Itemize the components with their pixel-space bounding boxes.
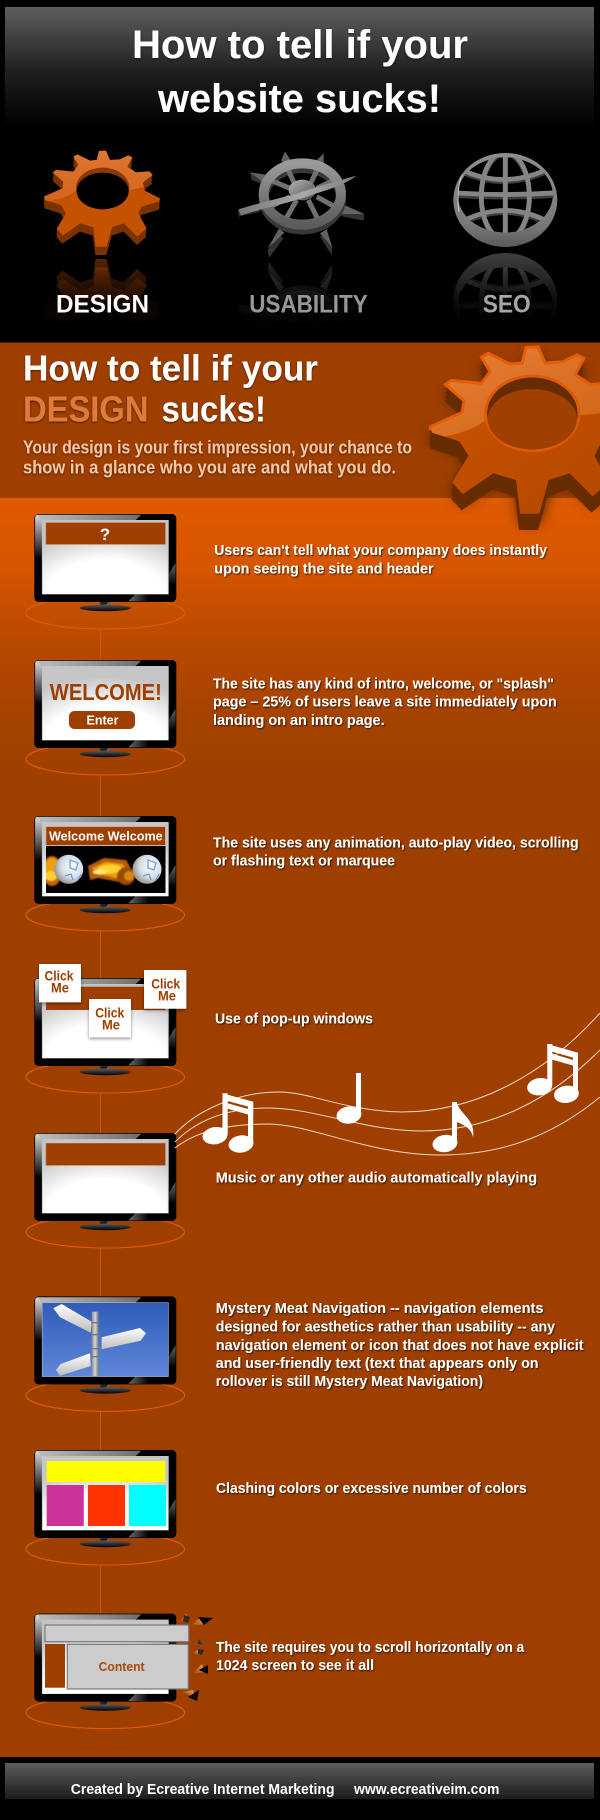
- item 1: monitor with question mark: [26, 514, 185, 629]
- item 3: monitor with animated marquee and flaming balls: [26, 816, 185, 931]
- section intro text: [23, 437, 412, 477]
- icon: usability wheel: [238, 152, 364, 258]
- item 1 text: upon seeing the site and header: [214, 561, 434, 577]
- item 6 text: Mystery Meat Navigation -- navigation elements: [216, 1301, 543, 1317]
- item 2 text: landing on an intro page.: [213, 713, 385, 729]
- item 6 text: and user-friendly text (text that appears only on: [216, 1356, 539, 1372]
- item 2 text: [213, 676, 557, 729]
- section intro text: Your design is your first impression, your chance to: [23, 437, 412, 457]
- icon: design gear: [30, 140, 170, 255]
- section heading: [23, 348, 318, 430]
- pop-up window 1: [39, 964, 81, 1002]
- item 5 text: Music or any other audio automatically playing: [216, 1170, 537, 1186]
- footer url: www.ecreativeim.com: [353, 1782, 499, 1798]
- pop-up window 1: Me: [51, 981, 69, 996]
- item 6: monitor with signpost: [26, 1296, 185, 1411]
- main title: website sucks!: [157, 77, 441, 121]
- item 1 text: [214, 543, 547, 577]
- pop-up window 2: Click: [151, 977, 181, 992]
- item 3 text: or flashing text or marquee: [213, 853, 395, 869]
- section intro text: show in a glance who you are and what you do.: [23, 457, 396, 477]
- icon: quarter note: [335, 1073, 363, 1125]
- main title: [132, 23, 468, 121]
- item 1: monitor with question mark: ?: [100, 525, 110, 544]
- item 2: monitor with welcome splash: Enter: [87, 714, 119, 728]
- section top background: [0, 342, 600, 498]
- item 2 text: The site has any kind of intro, welcome, or "splash": [213, 676, 554, 692]
- item 8 text: The site requires you to scroll horizontally on a: [216, 1640, 525, 1656]
- pop-up window 3: Click: [95, 1006, 125, 1021]
- footer panel: [5, 1763, 594, 1799]
- footer credit: Created by Ecreative Internet Marketing: [71, 1782, 335, 1798]
- section heading: DESIGN: [23, 389, 148, 430]
- item 7 text: Clashing colors or excessive number of colors: [216, 1481, 527, 1497]
- icon: beamed notes right: [526, 1044, 580, 1105]
- item 2 text: page – 25% of users leave a site immediately upon: [213, 694, 557, 710]
- item 4 text: Use of pop-up windows: [215, 1011, 373, 1027]
- label: usability: USABILITY: [249, 291, 368, 319]
- main title: How to tell if your: [132, 23, 468, 67]
- item 8: monitor with overflowing content: [26, 1614, 213, 1729]
- icon: usability wheel reflection: [225, 260, 385, 368]
- item 1 text: Users can't tell what your company does instantly: [214, 543, 547, 559]
- item 6 text: rollover is still Mystery Meat Navigation): [216, 1374, 483, 1390]
- icon: design gear reflection: [25, 257, 180, 374]
- item 8 text: [216, 1640, 525, 1674]
- pop-up window 1: Click: [44, 969, 74, 984]
- section heading: How to tell if your: [23, 348, 318, 389]
- pop-up window 3: Me: [102, 1017, 120, 1032]
- item 7: monitor with clashing colours: [26, 1450, 185, 1565]
- icon: seo globe reflection: [440, 250, 570, 350]
- item 2: monitor with welcome splash: WELCOME!: [50, 679, 162, 705]
- icon: eighth note: [431, 1102, 473, 1154]
- item 6 text: designed for aesthetics rather than usability -- any: [216, 1319, 555, 1335]
- pop-up window 3: [89, 999, 131, 1037]
- item 4: monitor with pop-ups: [26, 964, 186, 1093]
- music staff and notes: [175, 1013, 600, 1155]
- icon: beamed notes left: [201, 1093, 255, 1154]
- header panel: [5, 7, 594, 374]
- item 2: monitor with welcome splash: [26, 660, 185, 775]
- footer gradient band: [5, 1763, 594, 1799]
- item 8: monitor with overflowing content: Content: [99, 1659, 145, 1674]
- item 3 text: [213, 835, 579, 869]
- pop-up window 2: [144, 970, 186, 1009]
- item 6 text: navigation element or icon that does not have explicit: [216, 1338, 584, 1354]
- timeline connectors: [100, 629, 102, 1614]
- item 8 text: 1024 screen to see it all: [216, 1658, 374, 1674]
- item 6 text: [216, 1301, 584, 1390]
- pop-up window 2: Me: [158, 989, 176, 1004]
- icon: burst shards: [179, 1614, 213, 1701]
- header gradient band: [5, 7, 594, 127]
- icon: seo globe: [450, 150, 560, 247]
- item 3: monitor with animated marquee and flaming balls: Welcome Welcome: [49, 828, 163, 843]
- label: seo: SEO: [483, 291, 531, 319]
- item 5: monitor with audio: [26, 1133, 185, 1248]
- design section panel: [0, 328, 600, 1757]
- section heading: sucks!: [162, 389, 266, 430]
- list background: [0, 498, 600, 1757]
- item 3 text: The site uses any animation, auto-play video, scrolling: [213, 835, 579, 851]
- label: design: DESIGN: [56, 291, 149, 319]
- icon: large gear: [424, 345, 600, 533]
